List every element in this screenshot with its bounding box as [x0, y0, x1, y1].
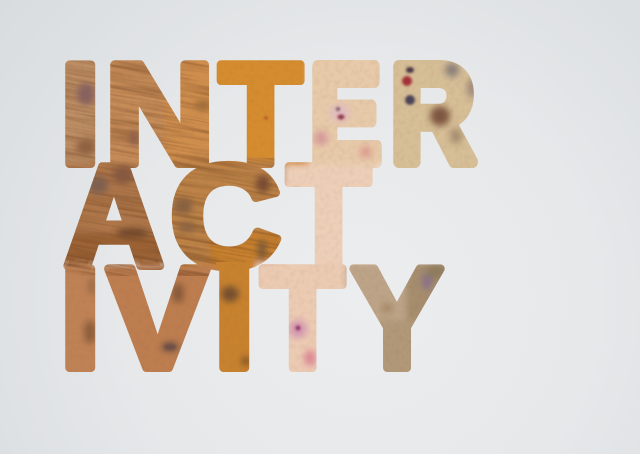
letter I: I	[60, 33, 101, 194]
letter V: V	[108, 238, 208, 399]
letter A: A	[64, 135, 164, 296]
letter T: T	[261, 237, 344, 399]
title: INTERACTIVITY	[60, 33, 475, 399]
letter T: T	[287, 135, 370, 297]
letter Y: Y	[351, 238, 443, 398]
letter C: C	[170, 135, 281, 297]
title row 2: ACT	[64, 135, 370, 297]
letter T: T	[219, 33, 302, 195]
title row 1: INTER	[60, 33, 475, 195]
letter R: R	[391, 37, 475, 192]
title row 3: IVITY	[60, 237, 443, 399]
letter N: N	[105, 35, 215, 195]
letter I: I	[214, 237, 255, 398]
letter E: E	[310, 37, 381, 192]
letter I: I	[60, 237, 101, 398]
